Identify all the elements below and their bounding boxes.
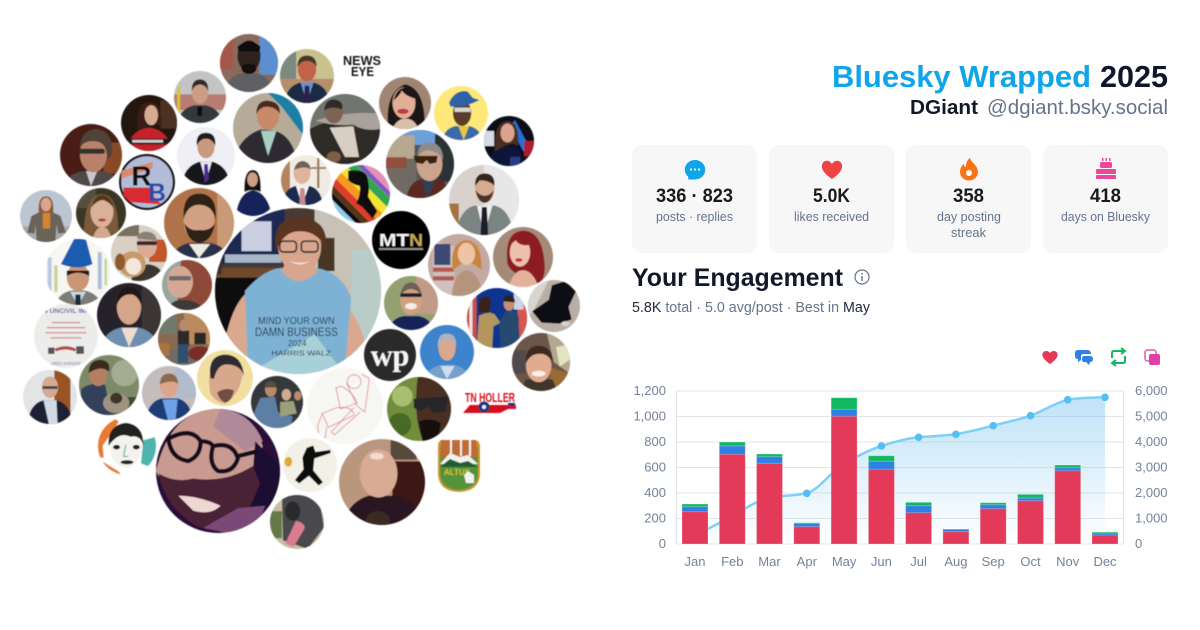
stat card: days on Bluesky: days on Bluesky [1061,209,1150,224]
avatar: man with tortoiseshell sunglasses [385,129,455,199]
profile name and handle: DGiant [910,97,978,119]
avatar: man with a small dog [110,224,168,282]
avatar: smiling man on plane [511,332,571,392]
avatar: book cover An Uncivil War [34,304,98,368]
avatar: man in dark sunglasses [386,376,452,442]
right axis labels: 5,000 [1135,408,1168,424]
avatar: RB logo: R [131,160,152,191]
avatar: book cover An Uncivil War: GREG SARGENT [51,361,81,366]
avatar: man with cross behind [280,154,332,206]
month labels: Mar [758,554,781,569]
month labels: Feb [721,554,744,569]
avatar: smiling woman with dark hair [378,76,432,130]
left axis labels: 1,200 [633,383,666,398]
avatar: bald man in navy blazer [22,370,78,425]
title: 2025 [1100,59,1168,94]
right axis labels: 6,000 [1135,383,1168,398]
avatar: man in party hat [45,238,111,306]
avatar: RB logo [118,153,176,211]
avatar: woman in gray jacket [20,190,72,243]
avatar: main profile woman in blue shirt: 2024 [288,338,307,348]
month labels: Jun [871,554,892,569]
right axis labels: 3,000 [1135,460,1168,474]
avatar: woman on tv set [484,115,535,167]
stat card: day posting streak: day posting [937,209,1001,224]
avatar: main profile woman in blue shirt: DAMN BUSINESS [255,326,338,339]
avatar: rainbow silhouette [331,164,391,224]
profile name and handle: @dgiant.bsky.social [987,97,1168,119]
avatar: woman in navy with microphone [236,169,271,217]
cumulative points [803,394,1109,497]
avatar: smiling man with glasses in navy [383,275,439,331]
avatar: man with glasses in profile [59,123,123,187]
avatar: main profile woman in blue shirt: MIND YOUR OWN [258,316,335,327]
avatar: MTN logo [371,210,431,270]
month labels: Jan [685,554,705,569]
left axis labels: 600 [644,460,666,474]
stat card: days on Bluesky [1043,145,1168,253]
stat card: days on Bluesky: 418 [1090,186,1121,207]
engagement summary: 5.8K total · 5.0 avg/post · Best in May [632,300,871,316]
month labels: Aug [944,554,967,569]
avatar: smiling man in blue jacket [142,366,196,421]
left axis labels [633,383,666,551]
avatar: main profile woman in blue shirt [214,207,382,375]
avatar: MTN logo: N [409,230,423,250]
avatar: close up woman with long hair [75,187,127,239]
avatar: RB logo: B [148,180,166,207]
stat card: posts and replies [632,145,757,253]
icon: reposts arrows [1112,348,1125,366]
month labels: May [832,554,857,569]
icon: replies bubbles [1075,350,1093,365]
avatar: close up man on yellow [196,350,254,406]
avatar: woman selfie with glasses [162,259,213,311]
left axis labels: 1,000 [633,408,666,424]
avatar: Washington Post logo [363,328,417,382]
stacked bars: green reposts [682,398,1118,535]
cumulative line [695,397,1105,536]
right axis labels: 2,000 [1135,485,1168,500]
avatar: bald man in dark shirt [338,438,426,526]
icon: speech bubble [685,160,705,180]
right axis labels: 0 [1135,536,1142,551]
avatar: yellow cartoon man [433,85,489,141]
avatar: blonde woman with flag [428,234,490,297]
stat card: likes received [769,145,894,253]
left axis labels: 0 [659,536,666,551]
legend icons [1042,348,1160,366]
avatar: Alt US National Park Service badge: ALTUS [444,468,471,477]
avatar: man with a cat outdoors [78,354,140,416]
avatar: man in dark suit with purple tie [177,127,235,186]
icon: heart [822,161,842,179]
avatar: Alt US National Park Service badge [437,439,481,493]
avatar: News Eye logo: NEWS [343,53,381,68]
avatar: MTN logo: MT [379,230,410,250]
avatar: man in stadium [173,70,227,124]
stat card: posts and replies: 336 · 823 [656,186,733,207]
avatar: News Eye logo: EYE [351,64,374,79]
stat card: day posting streak [906,145,1031,253]
avatar: bearded man in gray suit [448,164,520,236]
month labels: Nov [1056,554,1080,569]
avatar: black fluffy dog [528,280,580,332]
avatar: Washington Post logo: wp [371,338,409,372]
stat card: likes received: likes received [794,209,869,224]
avatar: TN Holler logo: TN HOLLER [465,390,515,405]
stat card: day posting streak: 358 [953,186,984,207]
grid lines [676,391,1124,544]
cumulative area [695,397,1105,544]
heading: your engagement: Your Engagement [632,264,844,292]
avatar: red line sketch [308,368,382,444]
avatar: bearded man by brick wall [163,187,235,259]
profile name and handle [910,97,1168,119]
right axis labels: 1,000 [1135,510,1168,526]
month labels: Sep [982,554,1005,569]
stacked bars: blue replies [682,409,1118,536]
month labels: Apr [797,554,818,569]
stat card: day posting streak: streak [951,225,986,240]
icon: quotes squares [1145,350,1160,365]
month labels: Oct [1020,554,1041,569]
stat card: likes received: 5.0K [813,186,850,207]
avatar: main profile woman in blue shirt: HARRIS WALZ [271,349,332,358]
stacked bars: red likes [682,416,1118,544]
avatar: woman in a living room [157,312,211,366]
avatar: book cover An Uncivil War: AN UNCIVIL WAR [38,308,95,315]
icon: flame [960,158,978,180]
right axis labels: 4,000 [1135,434,1168,449]
avatar bubble cluster [20,34,580,549]
title: Bluesky Wrapped [832,59,1091,94]
avatar: men on a bench [250,375,304,429]
avatar: man in blazer [232,92,304,164]
month labels [685,554,1117,569]
engagement chart [633,383,1168,569]
avatar: large close up man with glasses [155,408,281,534]
stat card: posts and replies: posts · replies [656,209,733,224]
icon: likes heart [1042,351,1058,364]
avatar: Banksy flower thrower [283,438,337,492]
icon: info [855,270,869,284]
avatar: dog with tongue out [269,494,324,550]
avatar: red haired woman [492,226,554,288]
avatar: cartoon face [97,418,157,475]
avatar: two people shaking hands with flags [466,287,528,349]
avatar: white haired man on blue [419,324,475,380]
right axis labels [1135,383,1168,551]
avatar: TN Holler logo [463,390,516,413]
icon: birthday cake [1096,158,1116,179]
avatar: man in open collar blazer [96,282,162,348]
month labels: Jul [910,554,927,569]
avatar: man in hoodie [219,33,279,93]
avatar: News Eye logo [343,53,381,79]
month labels: Dec [1093,554,1117,569]
avatar: man lying with blanket [309,93,381,165]
left axis labels: 800 [644,434,666,449]
left axis labels: 400 [644,485,666,500]
left axis labels: 200 [644,510,666,526]
avatar: woman in red dress on tv [120,94,178,152]
avatar: man by the capitol [279,48,335,104]
